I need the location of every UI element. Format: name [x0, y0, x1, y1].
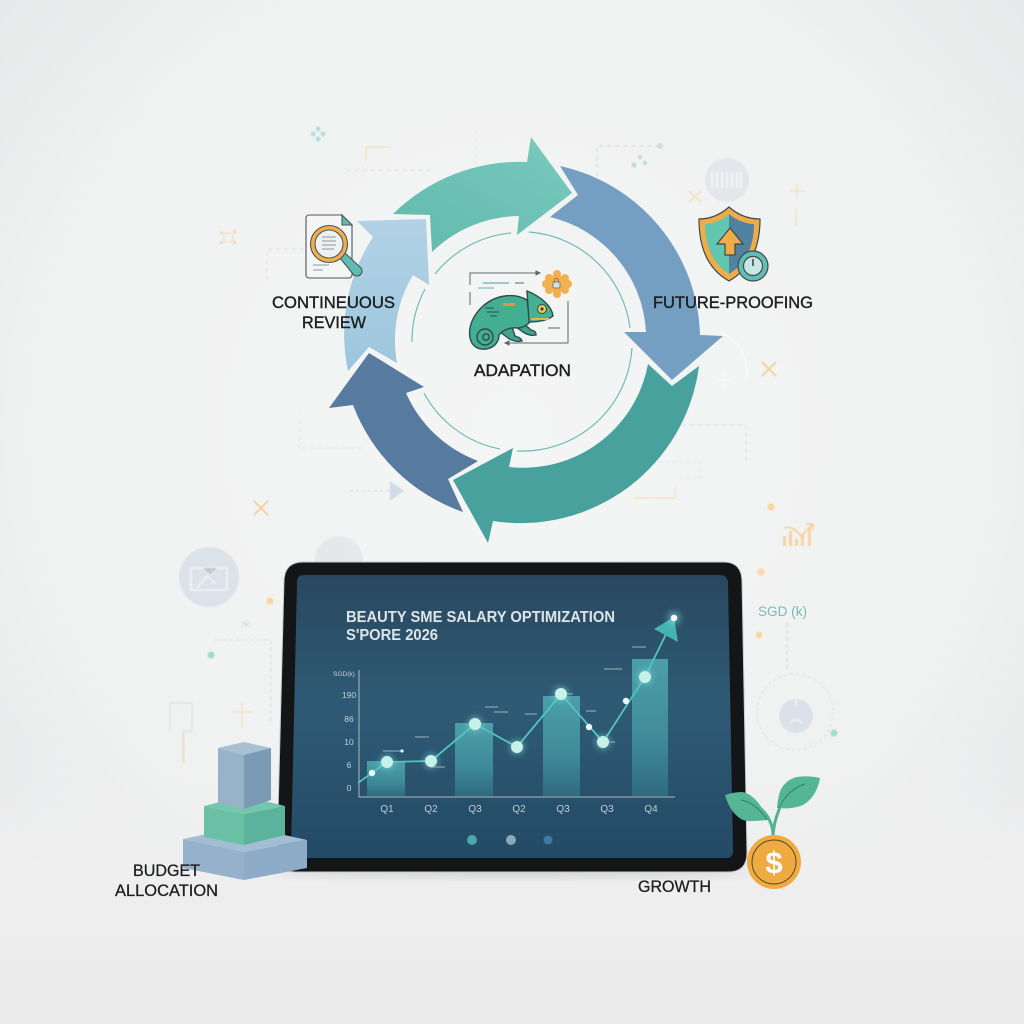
label: continuous review: REVIEW [302, 313, 366, 332]
label: sgd (k): SGD (k) [758, 604, 807, 619]
y axis labels: SGD(k) [333, 671, 355, 678]
arrow: continuous review segment [344, 219, 429, 371]
data points [369, 615, 677, 776]
y axis labels: 86 [344, 714, 354, 724]
tablet [272, 562, 752, 875]
icon: chameleon with adaptation arrows [470, 270, 572, 349]
y axis labels: 6 [347, 760, 352, 770]
label: budget allocation: BUDGET [133, 862, 200, 880]
label: growth: GROWTH [638, 878, 711, 896]
y axis labels: 190 [342, 690, 356, 700]
pagination dots [467, 835, 552, 845]
chart title: S'PORE 2026 [346, 627, 438, 644]
chart title: BEAUTY SME SALARY OPTIMIZATION [346, 609, 615, 626]
arrow: navy segment [329, 353, 478, 512]
inner dashed ring [412, 232, 632, 451]
bar chart [333, 612, 680, 815]
trend line [358, 622, 672, 783]
tablet screen [291, 575, 733, 858]
icon: document with magnifier [306, 215, 362, 278]
arrow: teal bottom segment [453, 364, 699, 543]
icon: coin with sprout: $ [765, 845, 783, 880]
chart title [346, 609, 615, 644]
arrow: adaptation top segment [393, 137, 572, 252]
tablet bezel [277, 562, 747, 872]
label: continuous review: CONTINEUOUS [272, 293, 395, 312]
cycle diagram [329, 137, 723, 543]
glow behind points [380, 612, 680, 769]
arrow: future-proofing segment [550, 166, 723, 380]
trend arrowhead [654, 617, 678, 642]
x axis labels: Q2 [512, 804, 526, 815]
middle green block [204, 796, 285, 845]
x axis labels: Q4 [644, 804, 658, 815]
x axis labels: Q2 [424, 804, 438, 815]
y axis labels [333, 671, 356, 793]
small annotation dashes [383, 647, 646, 767]
chameleon body [470, 291, 553, 349]
x axis labels: Q3 [468, 804, 482, 815]
bars [367, 659, 668, 796]
y axis labels: 0 [347, 783, 352, 793]
top block [218, 742, 271, 809]
tablet shadow [272, 869, 752, 875]
icon: shield with clock [699, 207, 768, 281]
x axis labels: Q1 [380, 804, 394, 815]
gear badge [542, 270, 572, 298]
axes [359, 670, 675, 797]
x axis labels: Q3 [600, 804, 614, 815]
decorative background icons and lines [170, 126, 838, 763]
icon: stacked budget blocks [183, 742, 307, 880]
label: adapation: ADAPATION [474, 361, 571, 380]
label: budget allocation [115, 862, 218, 900]
label: continuous review [272, 293, 395, 332]
label: budget allocation: ALLOCATION [115, 882, 218, 900]
y axis labels: 10 [344, 737, 354, 747]
x axis labels: Q3 [556, 804, 570, 815]
x axis labels [380, 804, 658, 815]
bottom block [183, 826, 307, 880]
label: future-proofing: FUTURE-PROOFING [653, 293, 813, 312]
icon: coin with sprout [725, 776, 820, 889]
